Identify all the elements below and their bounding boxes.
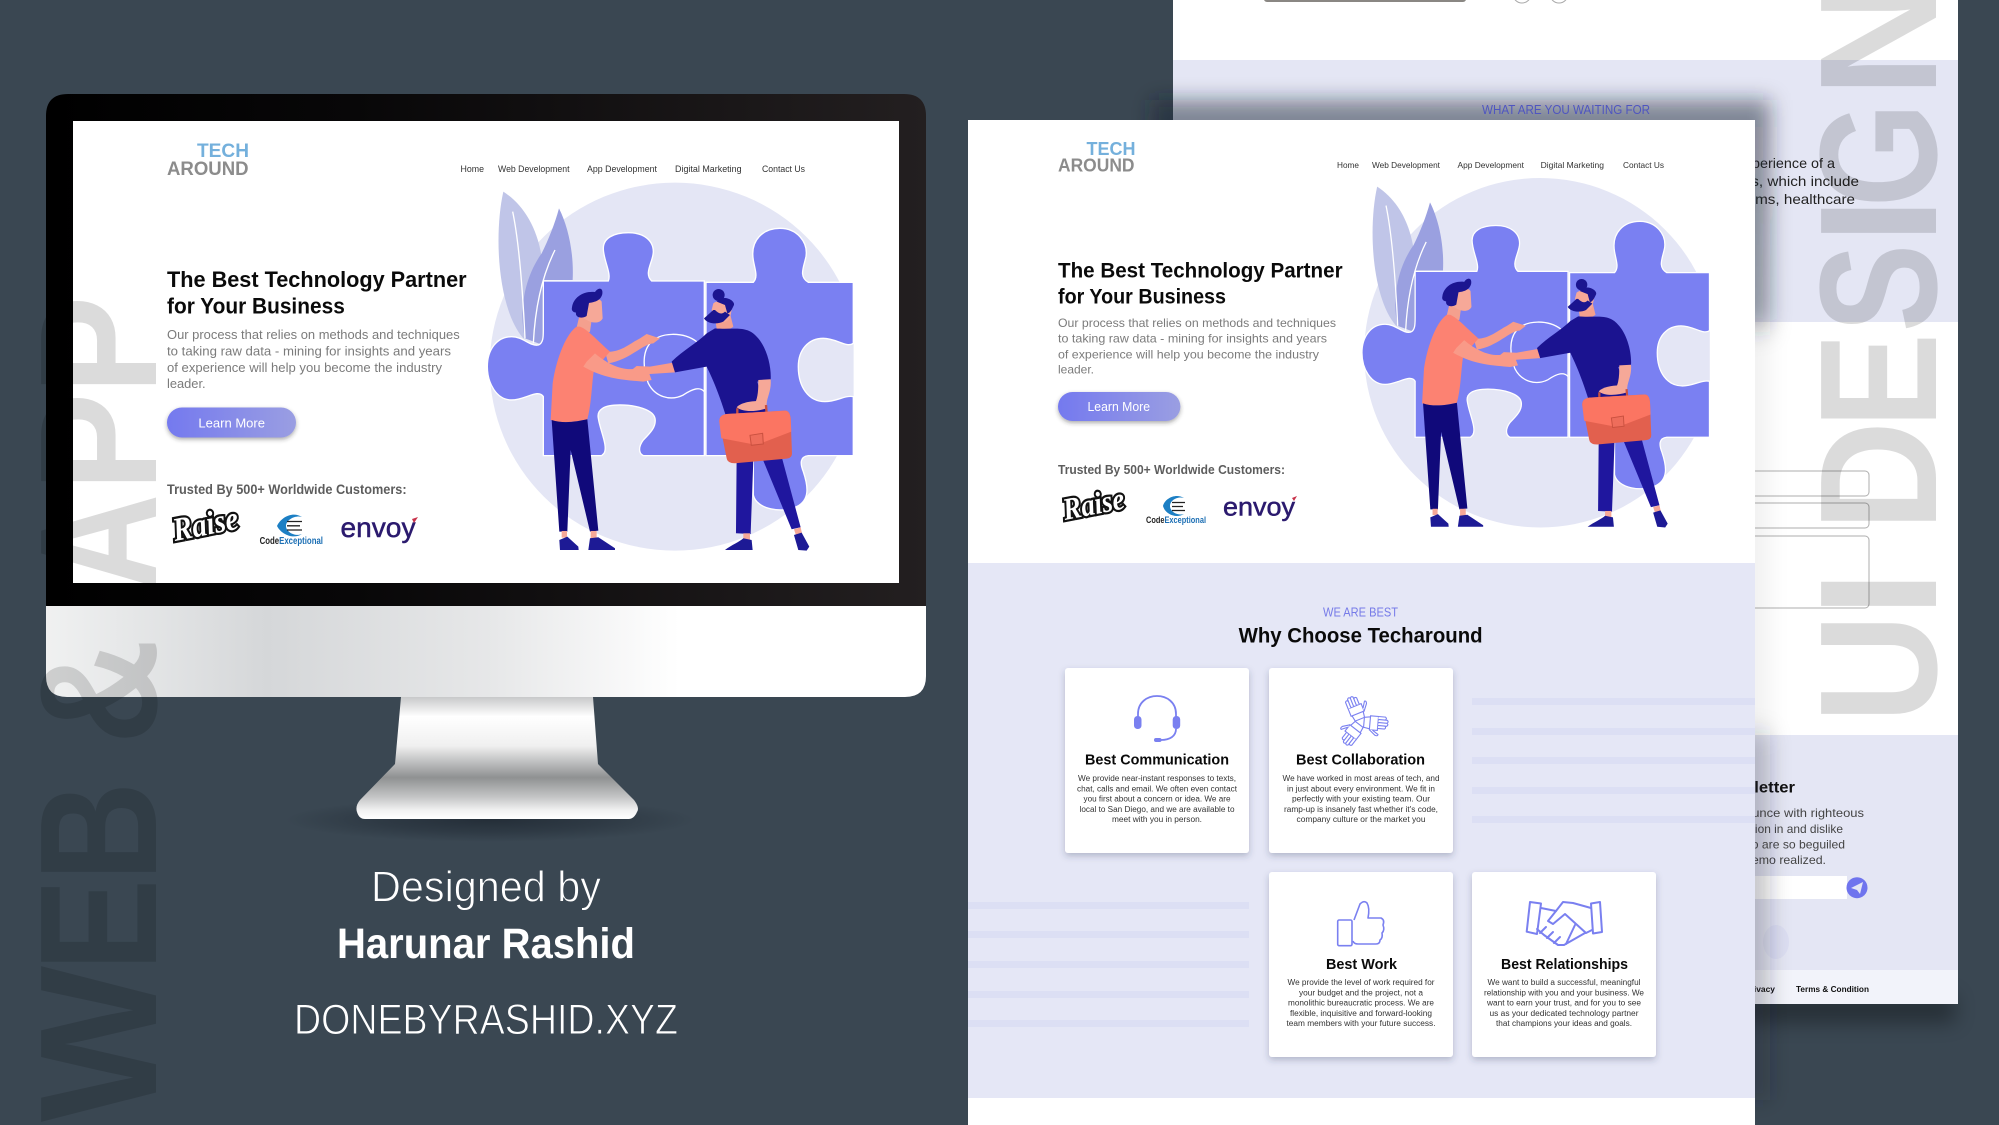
panel: back web page [1173, 0, 1958, 1004]
section heading: Why Choose Techaround [1239, 624, 1483, 648]
button [1058, 392, 1180, 421]
logo: CodeExceptional [260, 515, 323, 547]
watermark: UI DESIGN: S [1786, 244, 1972, 332]
icon: thumbs up [1338, 902, 1384, 946]
newsletter text [1745, 806, 1864, 867]
card text: you first about a concern or idea. We are [1084, 795, 1231, 804]
card text: company culture or the market you [1296, 815, 1426, 824]
faint decoration [1763, 925, 1789, 959]
monitor bezel [46, 94, 926, 606]
watermark: UI DESIGN: I [1786, 198, 1972, 244]
hero paragraph: of experience will help you become the industry [1058, 347, 1319, 361]
kicker: WE ARE BEST [1323, 604, 1398, 620]
navigation [460, 164, 806, 174]
hero heading [167, 267, 467, 319]
hero heading: for Your Business [1058, 285, 1226, 309]
back page paragraph: ts, which include [1747, 173, 1859, 189]
navigation: Contact Us [1623, 160, 1664, 170]
hero paragraph: of experience will help you become the industry [167, 361, 443, 375]
section: why choose [968, 563, 1755, 1098]
monitor stand shadow [285, 798, 695, 842]
hero heading: for Your Business [167, 294, 345, 319]
card text: perfectly with your existing team. Our [1292, 795, 1430, 804]
front page shadow [1152, 100, 1770, 1100]
logo: envoy: envoy [340, 512, 416, 543]
card text: team members with your future success. [1286, 1019, 1436, 1028]
illustration: handshake and puzzle [487, 183, 860, 551]
card text: We have worked in most areas of tech, and [1282, 774, 1440, 783]
card: best work [1269, 872, 1453, 1057]
footer links: Privacy [1745, 984, 1775, 994]
hero paragraph [1058, 316, 1336, 376]
navigation: Digital Marketing [1541, 160, 1604, 170]
panel: front web page [968, 120, 1755, 1125]
icon: send button [1846, 877, 1868, 898]
navigation: Home [460, 164, 484, 174]
monitor chin [46, 606, 926, 697]
card text: We want to build a successful, meaningful [1488, 978, 1641, 987]
card text: meet with you in person. [1112, 815, 1202, 824]
watermark: WEB & APP: P [6, 393, 192, 491]
card text: that champions your ideas and goals. [1496, 1019, 1632, 1028]
watermark: WEB & APP: & [6, 639, 192, 744]
button: Learn More [1088, 400, 1150, 414]
navigation: Home [1337, 160, 1359, 170]
card text: in just about every environment. We fit in [1287, 784, 1435, 793]
logo: AROUND [1058, 155, 1134, 176]
hero paragraph: to taking raw data - mining for insights and years [167, 344, 451, 358]
icon: handshake [1527, 902, 1602, 945]
trusted label: Trusted By 500+ Worldwide Customers: [167, 482, 407, 497]
button [167, 408, 296, 438]
hero paragraph: leader. [167, 377, 206, 391]
section: back page footer [1173, 970, 1958, 1004]
card text: chat, calls and email. We often even contact [1077, 784, 1238, 793]
watermark: WEB & APP: P [6, 296, 192, 394]
watermark: WEB & APP: W [6, 966, 192, 1122]
section: back page lavender band [1173, 60, 1958, 322]
hero heading [1058, 259, 1343, 309]
monitor [46, 94, 926, 819]
illustration: handshake and puzzle [1362, 178, 1716, 527]
back page kicker: WHAT ARE YOU WAITING FOR [1482, 102, 1650, 117]
logo: TECH [197, 140, 249, 162]
contact form inputs [1600, 471, 1869, 608]
watermark: UI DESIGN [1786, 0, 1972, 723]
hero heading: The Best Technology Partner [1058, 259, 1343, 283]
icon: headset [1134, 696, 1180, 742]
newsletter text: demo realized. [1745, 853, 1826, 867]
back page paragraph: rms, healthcare [1750, 191, 1855, 207]
button: Learn More [198, 416, 265, 430]
newsletter input [1600, 876, 1847, 899]
image strip at top [1264, 0, 1466, 2]
monitor screen [73, 121, 899, 583]
logo: envoy: envoy [1223, 492, 1295, 522]
card title: Best Collaboration [1296, 752, 1425, 769]
slider dots [1513, 0, 1568, 3]
newsletter text: ation in and dislike [1745, 822, 1843, 836]
hero paragraph: Our process that relies on methods and techniques [1058, 316, 1336, 330]
watermark: UI DESIGN: U [1786, 614, 1972, 723]
hero heading: The Best Technology Partner [167, 267, 467, 292]
card text: relationship with you and your business. We [1484, 988, 1645, 997]
card title: Best Work [1326, 956, 1398, 973]
newsletter heading: sletter [1745, 780, 1795, 796]
navigation: Digital Marketing [675, 164, 742, 174]
navigation: App Development [587, 164, 658, 174]
card: best collaboration [1269, 668, 1453, 853]
monitor stand [356, 697, 638, 819]
hero paragraph: leader. [1058, 362, 1094, 376]
credit text: Harunar Rashid: Harunar Rashid [337, 920, 635, 968]
watermark: WEB & APP [6, 296, 192, 1122]
card: best communication [1065, 668, 1249, 853]
watermark: UI DESIGN: D [1786, 421, 1972, 531]
navigation: Web Development [498, 164, 570, 174]
card text: ramp-up is insanely fast whether it's code, [1284, 805, 1438, 814]
watermark: UI DESIGN: G [1786, 103, 1972, 207]
decorative stripes [968, 698, 1755, 1027]
logo: AROUND [167, 158, 249, 180]
card title: Best Relationships [1501, 956, 1628, 973]
logo: Raise: Raise [169, 501, 241, 549]
watermark: UI DESIGN: I [1786, 571, 1972, 617]
card text: We provide the level of work required for [1288, 978, 1435, 987]
navigation [1337, 160, 1664, 170]
section: back page newsletter band [1173, 735, 1958, 970]
card text: us as your dedicated technology partner [1490, 1009, 1639, 1018]
card text: your budget and the project, not a [1299, 988, 1424, 997]
back page paragraph: perience of a [1752, 155, 1835, 171]
card title: Best Communication [1085, 752, 1229, 769]
watermark: WEB & APP: A [6, 494, 192, 590]
logo [167, 140, 249, 180]
trusted label: Trusted By 500+ Worldwide Customers: [1058, 462, 1285, 477]
icon: stacked hands [1335, 692, 1389, 748]
footer links: Terms & Condition [1796, 984, 1869, 994]
credit text: website: DONEBYRASHID.XYZ [294, 996, 678, 1044]
footer links [1745, 984, 1869, 994]
card text: monolithic bureaucratic process. We are [1288, 999, 1435, 1008]
back page paragraph [1747, 155, 1859, 207]
navigation: Web Development [1372, 160, 1441, 170]
credit text: Designed by: Designed by [371, 862, 601, 912]
card text [1282, 774, 1440, 824]
card text [1484, 978, 1645, 1028]
logo: TECH [1086, 138, 1136, 159]
navigation: Contact Us [762, 164, 806, 174]
logo: Raise: Raise [1059, 481, 1127, 527]
hero paragraph [167, 328, 460, 391]
card text [1286, 978, 1436, 1028]
newsletter text: ounce with righteous [1745, 806, 1864, 820]
logo [1058, 138, 1136, 176]
watermark: WEB & APP: B [6, 782, 192, 881]
watermark: UI DESIGN: E [1786, 333, 1972, 428]
hero paragraph: Our process that relies on methods and techniques [167, 328, 460, 342]
navigation: App Development [1458, 160, 1525, 170]
hero paragraph: to taking raw data - mining for insights and years [1058, 332, 1327, 346]
card text: flexible, inquisitive and forward-looking [1290, 1009, 1432, 1018]
logo: CodeExceptional [1146, 496, 1206, 526]
watermark: WEB & APP: E [6, 879, 192, 971]
card text: want to earn your trust, and for you to see [1486, 999, 1642, 1008]
card text: We provide near-instant responses to texts, [1078, 774, 1236, 783]
newsletter text: ho are so beguiled [1745, 838, 1845, 852]
card text [1077, 774, 1238, 824]
card: best relationships [1472, 872, 1656, 1057]
back page shadow [1180, 996, 1955, 1022]
logo: CodeExceptional: CodeExceptional [260, 536, 323, 547]
logo: CodeExceptional: CodeExceptional [1146, 515, 1206, 526]
card text: local to San Diego, and we are available to [1080, 805, 1235, 814]
